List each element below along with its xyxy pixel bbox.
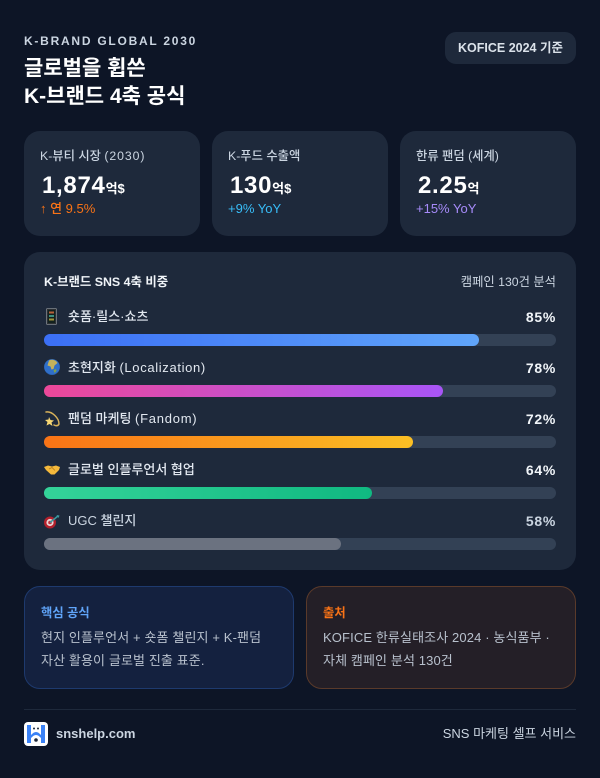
source text: 자체 캠페인 분석 130건 — [323, 653, 453, 668]
bar: 85% — [44, 334, 556, 346]
source text: KOFICE 한류실태조사 2024 · 농식품부 · — [323, 630, 550, 645]
callout: key formula — [24, 586, 294, 689]
source heading: 출처 — [323, 606, 346, 620]
value: 58%: 58% — [526, 513, 556, 529]
label: fandom marketing: 팬덤 마케팅 (Fandom) — [68, 411, 197, 426]
label: fandom: 한류 팬덤 (세계) — [416, 149, 499, 163]
panel heading: K-브랜드 SNS 4축 비중 — [44, 275, 168, 289]
bar row: short-form — [44, 308, 556, 346]
label: influencer: 글로벌 인플루언서 협업 — [68, 462, 195, 477]
value: 72%: 72% — [526, 411, 556, 427]
callout text: 현지 인플루언서 + 숏폼 챌린지 + K-팬덤 — [41, 630, 261, 645]
source badge — [445, 32, 576, 64]
growth: fandom: +15% YoY — [416, 201, 476, 216]
label: short-form: 숏폼·릴스·쇼츠 — [68, 309, 148, 324]
bar: 58% — [44, 538, 556, 550]
bar row: influencer — [44, 462, 556, 499]
growth: K-beauty: ↑ 연 9.5% — [40, 201, 95, 216]
icon: target — [44, 515, 60, 528]
bar row: localization — [44, 359, 556, 397]
value: 2.25: 2.25억 — [418, 172, 479, 199]
title: 글로벌을 휩쓴 — [24, 57, 146, 80]
bar: 78% — [44, 385, 556, 397]
callout: sources — [306, 586, 576, 689]
icon: globe — [44, 359, 60, 375]
logo: snshelp — [24, 722, 48, 746]
value: 1,874: 1,874억$ — [42, 172, 125, 199]
source badge: KOFICE 2024 기준 — [458, 41, 563, 55]
value: 85%: 85% — [526, 309, 556, 325]
source text — [323, 630, 550, 668]
label: UGC: UGC 챌린지 — [68, 513, 136, 528]
label: K-food: K-푸드 수출액 — [228, 149, 300, 163]
stat card: Hallyu fandom — [400, 131, 576, 236]
growth: K-food: +9% YoY — [228, 201, 281, 216]
brand name: snshelp.com — [56, 726, 135, 741]
bar row: UGC — [44, 513, 556, 550]
icon: phone — [46, 308, 57, 325]
bar: 72% — [44, 436, 556, 448]
stat card: K-food exports — [212, 131, 388, 236]
value: 78%: 78% — [526, 360, 556, 376]
callout heading: 핵심 공식 — [41, 606, 90, 620]
value: 130: 130억$ — [230, 172, 291, 199]
eyebrow label: K-BRAND GLOBAL 2030 — [24, 34, 197, 48]
bar: 64% — [44, 487, 556, 499]
panel: SNS share bar chart — [24, 252, 576, 570]
callout text — [41, 630, 261, 668]
title — [24, 57, 185, 108]
label: localization: 초현지화 (Localization) — [68, 360, 206, 375]
stat card: K-beauty market — [24, 131, 200, 236]
icon: handshake — [44, 466, 60, 474]
icon: dizzy star — [45, 411, 60, 426]
value: 64%: 64% — [526, 462, 556, 478]
callout text: 자산 활용이 글로벌 진출 표준. — [41, 653, 205, 668]
title: K-브랜드 4축 공식 — [24, 85, 185, 108]
bar row: fandom — [44, 411, 556, 448]
panel note: 캠페인 130건 분석 — [461, 275, 556, 289]
label: K-beauty: K-뷰티 시장 (2030) — [40, 149, 145, 163]
footer tagline: SNS 마케팅 셀프 서비스 — [443, 726, 576, 741]
